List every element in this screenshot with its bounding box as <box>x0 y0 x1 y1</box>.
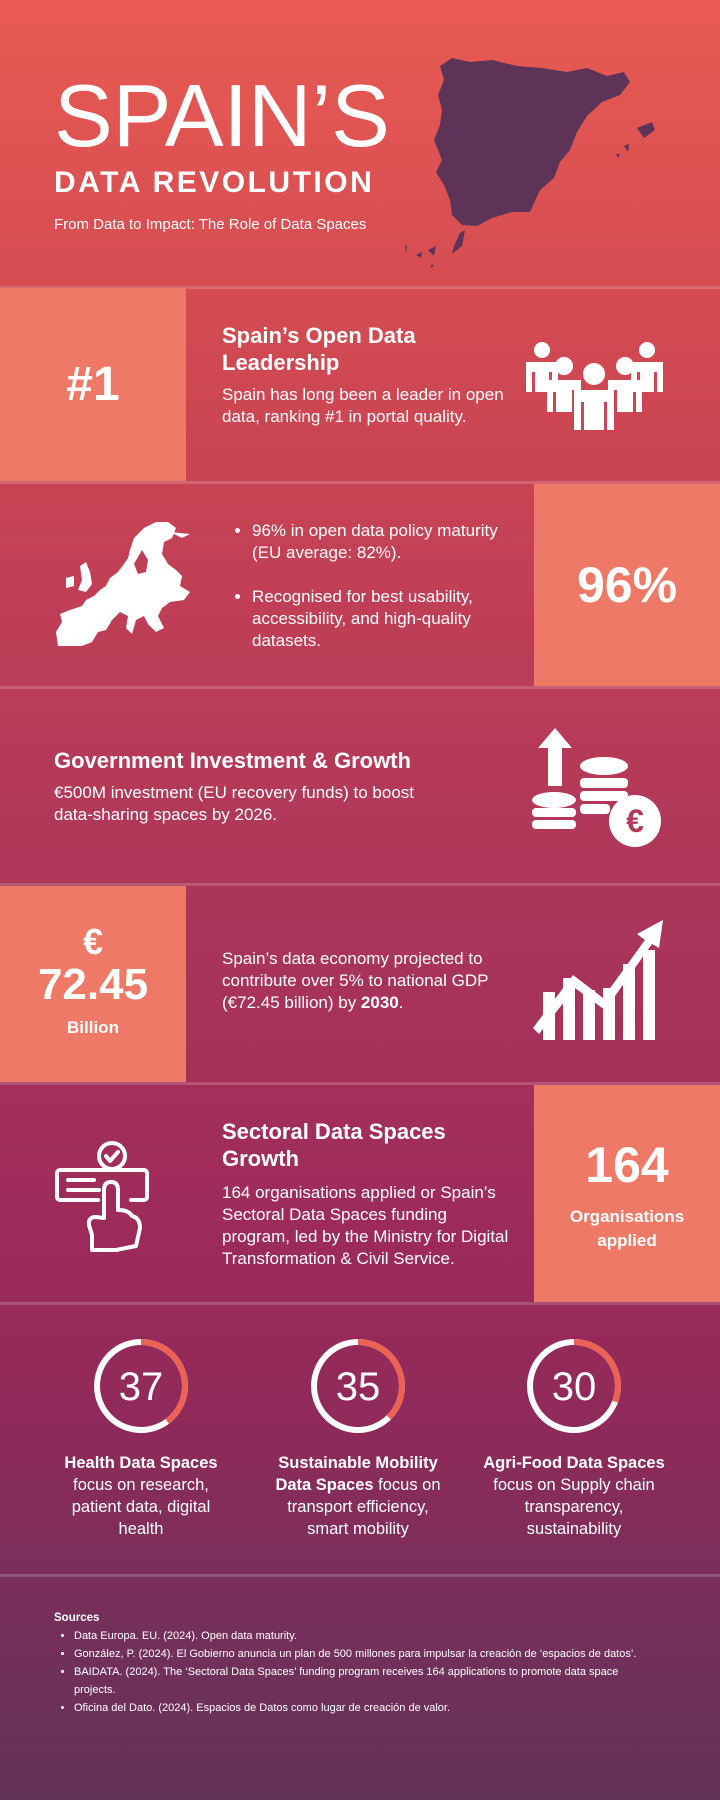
sources <box>54 1612 636 1714</box>
donut: 35 mobility: Sustainable Mobility Data Spaces focus on transport efficiency, smart mobility <box>275 1454 441 1538</box>
sources: Sources <box>54 1612 99 1624</box>
donut: 37 health <box>64 1339 218 1538</box>
donut: 30 agri-food: Agri-Food Data Spaces <box>483 1454 665 1472</box>
text: sectoral data spaces: 164 organisations applied or Spain’s Sectoral Data Spaces funding program, led by the Ministry for Digital Transformation & Civil Service. <box>222 1183 508 1268</box>
donut: 30 agri-food: sustainability <box>527 1520 621 1538</box>
text: sectoral data spaces <box>222 1119 508 1268</box>
icon: Europe map <box>56 522 190 646</box>
title <box>54 66 390 233</box>
text: open data leadership: Spain’s Open Data Leadership <box>222 323 416 375</box>
donut: 37 health: 37 <box>119 1365 163 1409</box>
title: SPAIN’S <box>54 66 390 165</box>
text: data economy: Spain’s data economy projected to contribute over 5% to national GDP (€72.45 billion) by 2030. <box>222 949 488 1012</box>
box: 72.45 billion: 72.45 <box>38 960 148 1009</box>
sources: Data Europa. EU. (2024). Open data maturity. <box>74 1630 297 1642</box>
donut: 30 agri-food: transparency, <box>525 1498 623 1516</box>
icon: map of Spain <box>405 58 655 268</box>
icon: hand with check <box>55 1141 149 1252</box>
box: 96%: 96% <box>577 557 677 613</box>
box: 164 <box>534 1085 720 1302</box>
donut: 35 mobility: 35 <box>336 1365 380 1409</box>
box: 164: applied <box>597 1231 657 1250</box>
sources: Oficina del Dato. (2024). Espacios de Datos como lugar de creación de valor. <box>74 1702 450 1714</box>
donut: 30 agri-food: 30 <box>552 1365 596 1409</box>
text: policy maturity bullets <box>235 521 498 650</box>
title: DATA REVOLUTION <box>54 166 374 199</box>
text: government investment: €500M investment (EU recovery funds) to boost data-sharing spaces by 2026. <box>54 783 414 824</box>
donut: 37 health: Health Data Spaces <box>64 1454 218 1472</box>
box: 72.45 billion: € <box>83 921 103 962</box>
text: government investment <box>54 748 414 824</box>
box: 164: Organisations <box>570 1207 684 1226</box>
title: From Data to Impact: The Role of Data Spaces <box>54 216 366 233</box>
box: 72.45 billion <box>0 886 186 1082</box>
chart: donut circles <box>64 1339 665 1538</box>
icon: coins <box>532 728 661 847</box>
sources: González, P. (2024). El Gobierno anuncia un plan de 500 millones para impulsar la creación de ‘espacios de datos’. <box>74 1648 636 1660</box>
sources: BAIDATA. (2024). The ‘Sectoral Data Spaces’ funding program receives 164 applications to promote data space projects. <box>74 1666 618 1696</box>
box: 164: 164 <box>585 1137 669 1193</box>
text: open data leadership: Spain has long been a leader in open data, ranking #1 in portal quality. <box>222 385 504 426</box>
box: 96% <box>534 484 720 686</box>
text: government investment: Government Investment & Growth <box>54 748 411 773</box>
box: 72.45 billion: Billion <box>67 1018 119 1037</box>
donut: 37 health: focus on research, patient data, digital health <box>72 1476 210 1538</box>
icon: coins: € <box>626 803 644 839</box>
box: #1: #1 <box>66 358 120 411</box>
box: #1 <box>0 288 186 481</box>
donut: 35 mobility <box>275 1339 441 1538</box>
text: sectoral data spaces: Sectoral Data Spaces Growth <box>222 1119 446 1171</box>
text: open data leadership <box>222 323 504 426</box>
donut: 30 agri-food <box>483 1339 665 1538</box>
icon: growth chart <box>533 920 663 1040</box>
icon: people <box>526 342 663 430</box>
text: policy maturity bullets: Recognised for best usability, accessibility, and high-quality datasets. <box>252 587 473 650</box>
text: policy maturity bullets: 96% in open data policy maturity (EU average: 82%). <box>252 521 498 562</box>
donut: 30 agri-food: focus on Supply chain <box>493 1476 655 1494</box>
